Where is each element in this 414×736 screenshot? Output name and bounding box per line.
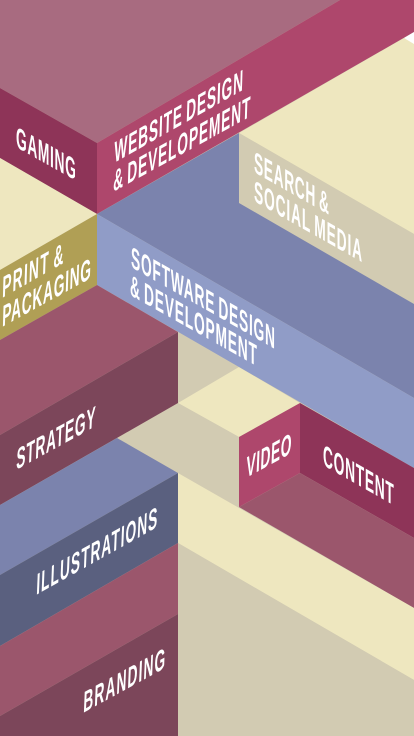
panel: center cream diamond [178,367,300,437]
label: gaming: GAMING [16,121,76,188]
panel: illustrations [0,473,178,646]
panel: print and packaging [0,214,97,340]
label: website design and developement: & DEVELOPEMENT [113,90,251,200]
panel: strategy [0,332,178,505]
white corner [404,32,414,45]
label: video: VIDEO [246,427,292,486]
panel: website design [97,0,414,214]
label: illustrations: ILLUSTRATIONS [36,501,158,603]
panel: upper right cream top [239,38,414,234]
label: software design and development: SOFTWARE DESIGN [131,241,275,357]
panel: lower beige [178,543,414,736]
label: software design and development: & DEVELOPMENT [130,269,257,374]
panel: content [300,403,414,538]
panel: blue top face [97,133,414,398]
label: content: CONTENT [323,439,394,513]
label: search and social media: SEARCH & [254,146,329,222]
panel: illustrations top face [0,438,178,575]
panel: search and social media [239,133,414,304]
panel: strategy top face [0,285,178,435]
label: strategy: STRATEGY [16,400,96,478]
panel: center beige lower [117,403,239,507]
panel: content floor [239,473,414,608]
panel: branding top face [0,543,178,716]
panel: left cream face [0,158,97,270]
label: search and social media: SOCIAL MEDIA [254,175,362,270]
panel: video [239,403,300,507]
panel: branding [0,614,178,736]
label: print and packaging: PRINT & [2,237,64,305]
label: website design and developement: WEBSITE DESIGN [114,64,244,170]
panel: gaming [0,88,97,214]
panel: lower cream strip [178,473,414,680]
label: branding: BRANDING [83,642,166,721]
panel: center beige upper [178,332,239,403]
panel: top face [0,0,340,143]
panel: software design [97,214,414,468]
label: print and packaging: PACKAGING [2,252,92,335]
